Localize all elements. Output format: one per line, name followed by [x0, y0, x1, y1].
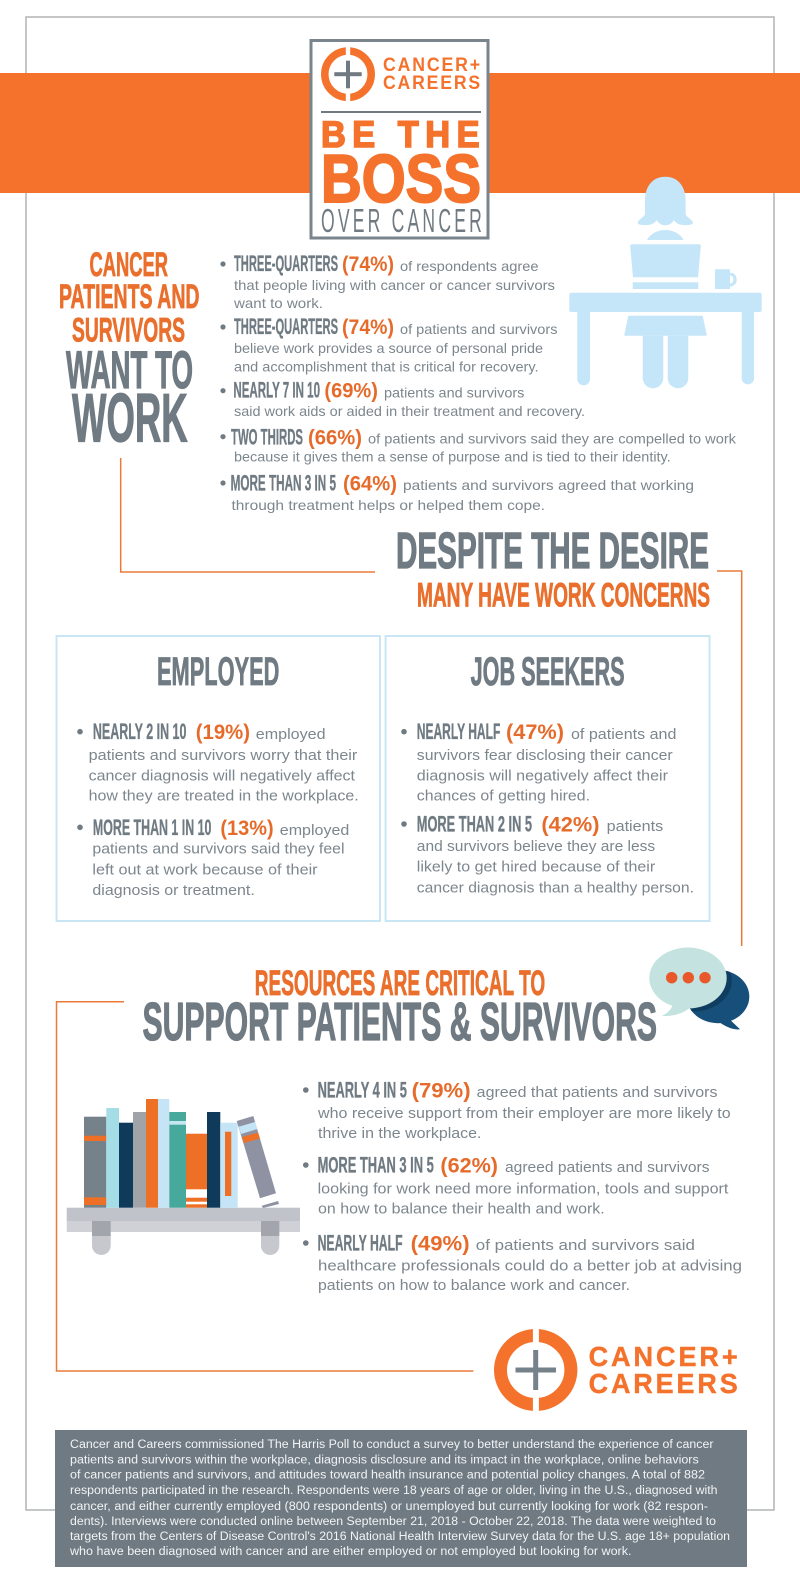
heading: cancer patients and survivors want to work — [59, 246, 200, 457]
stat: 49 percent: patients on how to balance work and cancer. — [318, 1277, 630, 1294]
stat: 62 percent: (62%) — [440, 1154, 498, 1177]
stat: 19 percent: how they are treated in the workplace. — [89, 787, 359, 804]
stat: 42 percent — [401, 812, 694, 897]
title: OVER CANCER — [321, 202, 485, 239]
panel: survey methodology footnote: respondents participated in the research. Respondents were 18 years of age or older, living in the U.S., diagnosed with — [70, 1485, 718, 1497]
connector: orange line to resources — [717, 571, 742, 946]
stat: 19 percent: NEARLY 2 IN 10 — [93, 719, 186, 744]
stat: 79 percent: who receive support from their employer are more likely to — [317, 1105, 731, 1122]
stat: 42 percent: and survivors believe they are less — [417, 838, 655, 855]
shelf — [67, 1208, 300, 1255]
panel: job seekers — [386, 636, 710, 921]
panel: survey methodology footnote: dents). Interviews were conducted online between September 21, 2018 - October 22, 2018. The data were weighted to — [70, 1516, 716, 1528]
stat: 62 percent: MORE THAN 3 IN 5 — [318, 1152, 434, 1177]
stat: 47 percent: NEARLY HALF — [417, 719, 500, 744]
stat: 13 percent: employed — [280, 822, 349, 839]
stat: 42 percent: (42%) — [541, 814, 600, 837]
stat: 64 percent — [220, 471, 694, 513]
heading: cancer patients and survivors want to work: WORK — [72, 380, 188, 457]
stat: 42 percent: cancer diagnosis than a healthy person. — [417, 880, 694, 897]
panel: survey methodology footnote: targets from the Centers of Disease Control's 2016 National Health Interview Survey data for the U.S. age 18+ population — [70, 1531, 730, 1543]
stat: 69 percent: patients and survivors — [384, 384, 524, 400]
stat: 49 percent: NEARLY HALF — [318, 1231, 403, 1256]
stat: 19 percent: (19%) — [196, 721, 250, 744]
stat: 47 percent: survivors fear disclosing their cancer — [417, 747, 673, 764]
stat: 66 percent: of patients and survivors said they are compelled to work — [368, 430, 737, 446]
panel: survey methodology footnote: cancer, and either currently employed (800 respondents) or unemployed but currently looking for work (82 respon- — [70, 1501, 708, 1513]
stat: 74 percent pride: THREE-QUARTERS — [234, 314, 338, 339]
title — [321, 114, 486, 239]
stat: 13 percent: patients and survivors said they feel — [92, 840, 345, 857]
stat: 47 percent: chances of getting hired. — [417, 787, 590, 804]
stat: 62 percent: agreed patients and survivors — [505, 1159, 710, 1176]
stat: 74 percent pride — [220, 314, 558, 375]
icon: ring with plus — [500, 1326, 571, 1414]
wordmark: CAREERS — [589, 1368, 741, 1399]
footer logo — [500, 1326, 741, 1414]
stat: 19 percent: cancer diagnosis will negatively affect — [89, 767, 356, 784]
icon: cancer and careers ring with plus — [325, 46, 371, 103]
books — [84, 1099, 279, 1208]
heading: despite the desire — [396, 522, 710, 614]
stat: 74 percent pride: (74%) — [342, 316, 394, 339]
list: resources statistics — [303, 1077, 742, 1294]
stat: 62 percent — [303, 1152, 729, 1217]
stat: 79 percent: thrive in the workplace. — [318, 1125, 482, 1142]
stat: 66 percent: TWO THIRDS — [231, 424, 303, 449]
stat: 74 percent want to work: THREE-QUARTERS — [234, 251, 338, 276]
icon: person working at desk — [569, 177, 762, 388]
stat: 13 percent: diagnosis or treatment. — [92, 882, 255, 899]
stat: 69 percent: NEARLY 7 IN 10 — [233, 378, 320, 403]
stat: 74 percent pride: of patients and survivors — [400, 321, 558, 337]
stat: 47 percent: of patients and — [571, 726, 676, 743]
title: BOSS — [321, 141, 481, 217]
stat: 19 percent: employed — [256, 726, 326, 743]
stat: 74 percent pride: believe work provides a source of personal pride — [234, 340, 543, 356]
stat: 64 percent: through treatment helps or helped them cope. — [232, 497, 545, 513]
stat: 79 percent: agreed that patients and survivors — [477, 1084, 718, 1101]
stat: 64 percent: MORE THAN 3 IN 5 — [231, 471, 336, 496]
stat: 74 percent want to work: (74%) — [342, 253, 394, 276]
panel: survey methodology footnote — [55, 1430, 747, 1567]
heading: resources are critical: RESOURCES ARE CRITICAL TO — [255, 964, 545, 1003]
panel heading: job seekers: JOB SEEKERS — [471, 650, 624, 694]
stat: 66 percent — [220, 424, 737, 465]
list: want to work statistics — [220, 251, 737, 513]
stat: 42 percent: likely to get hired because of their — [417, 859, 655, 876]
icon: bookshelf — [67, 1099, 300, 1255]
stat: 74 percent want to work: that people living with cancer or cancer survivors — [234, 277, 555, 293]
stat: 66 percent: because it gives them a sense of purpose and is tied to their identity. — [234, 449, 671, 465]
stat: 79 percent: (79%) — [412, 1079, 471, 1102]
stat: 13 percent — [77, 815, 349, 899]
wordmark: CANCER+ — [589, 1341, 741, 1372]
stat: 13 percent: left out at work because of their — [92, 861, 318, 878]
connector: orange line around resources — [56, 1002, 473, 1371]
heading: resources are critical — [142, 964, 657, 1052]
stat: 19 percent — [77, 719, 359, 804]
orange header band — [0, 73, 800, 193]
panel: employed — [56, 636, 380, 921]
stat: 69 percent — [220, 378, 585, 419]
heading: cancer patients and survivors want to work: CANCER — [90, 246, 168, 284]
panel heading: employed: EMPLOYED — [157, 650, 279, 694]
stat: 13 percent: MORE THAN 1 IN 10 — [93, 815, 211, 840]
stat: 74 percent want to work: want to work. — [233, 295, 323, 311]
stat: 47 percent — [401, 719, 676, 804]
stat: 42 percent: MORE THAN 2 IN 5 — [417, 812, 532, 837]
stat: 19 percent: patients and survivors worry that their — [89, 747, 357, 764]
panel: survey methodology footnote: who have been diagnosed with cancer and are either employed or not employed but looking for work. — [69, 1546, 631, 1558]
icon: speech bubbles — [649, 948, 749, 1029]
stat: 42 percent: patients — [607, 818, 663, 835]
stat: 49 percent — [303, 1231, 742, 1294]
stat: 79 percent — [303, 1077, 731, 1142]
panel: survey methodology footnote: of cancer patients and survivors, and attitudes toward health insurance and potential policy changes. A total of 882 — [70, 1470, 705, 1482]
stat: 64 percent: patients and survivors agreed that working — [403, 477, 694, 493]
stat: 74 percent want to work — [220, 251, 555, 311]
stat: 69 percent: said work aids or aided in their treatment and recovery. — [234, 403, 585, 419]
panel: survey methodology footnote: Cancer and Careers commissioned The Harris Poll to conduct a survey to better understand the experience of cancer — [70, 1439, 714, 1451]
stat: 64 percent: (64%) — [343, 473, 397, 496]
logo wordmark: CAREERS — [383, 73, 482, 94]
title: BE THE — [321, 114, 486, 155]
panel: survey methodology footnote: patients and survivors within the workplace, diagnosis disclosure and its impact in the workplace, online behaviors — [70, 1454, 699, 1466]
header logo badge — [311, 40, 488, 239]
stat: 49 percent: of patients and survivors said — [476, 1237, 695, 1254]
wordmark — [589, 1341, 741, 1399]
stat: 13 percent: (13%) — [220, 817, 274, 840]
stat: 47 percent: (47%) — [506, 721, 564, 744]
stat: 62 percent: looking for work need more information, tools and support — [318, 1180, 729, 1197]
stat: 49 percent: healthcare professionals could do a better job at advising — [318, 1258, 742, 1275]
stat: 69 percent: (69%) — [324, 380, 378, 403]
logo wordmark: CANCER+ — [383, 55, 482, 76]
stat: 66 percent: (66%) — [308, 426, 362, 449]
stat: 74 percent want to work: of respondents agree — [400, 258, 539, 274]
stat: 47 percent: diagnosis will negatively affect their — [417, 767, 668, 784]
stat: 74 percent pride: and accomplishment that is critical for recovery. — [234, 359, 539, 375]
logo wordmark — [383, 55, 482, 94]
stat: 49 percent: (49%) — [411, 1233, 470, 1256]
heading: cancer patients and survivors want to work: PATIENTS AND — [59, 278, 200, 316]
heading: cancer patients and survivors want to work: SURVIVORS — [72, 312, 185, 350]
stat: 79 percent: NEARLY 4 IN 5 — [318, 1077, 407, 1102]
connector: orange line to despite heading — [121, 458, 375, 572]
heading: cancer patients and survivors want to work: WANT TO — [66, 341, 193, 400]
stat: 62 percent: on how to balance their health and work. — [318, 1200, 605, 1217]
